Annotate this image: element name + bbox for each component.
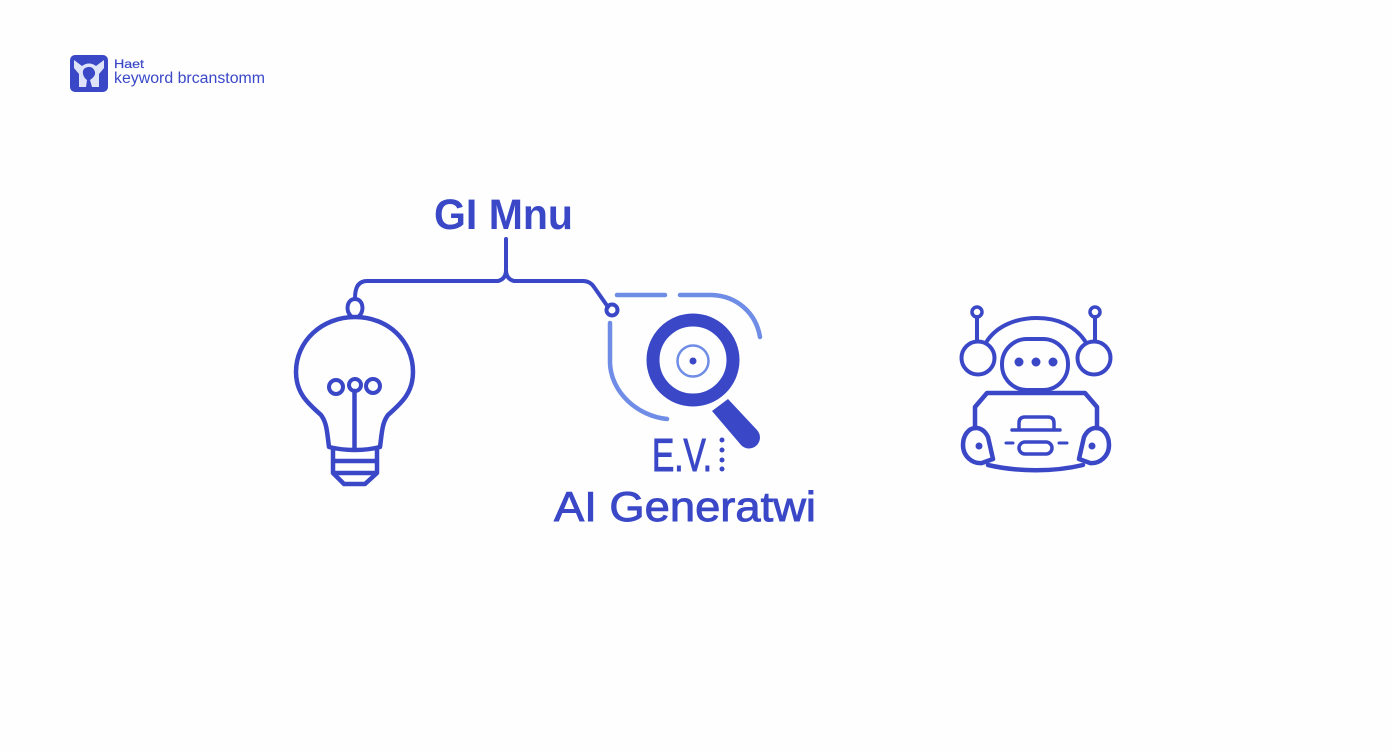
label: E.V.: E.V. — [652, 429, 712, 481]
icon: light bulb — [296, 299, 413, 484]
bulb top loop — [348, 299, 362, 316]
connector: menu branches to bulb and magnifier — [355, 239, 618, 316]
robot body — [975, 393, 1097, 428]
target in lens — [678, 346, 708, 376]
label: AI Generatwi: AI Generatwi — [554, 483, 816, 530]
dashed arc frame — [610, 295, 760, 419]
robot face — [1002, 339, 1068, 390]
robot ears — [962, 342, 1110, 374]
bulb glass — [296, 317, 413, 450]
bulb screw base — [333, 449, 377, 484]
robot antennas — [972, 307, 1100, 340]
magnifier group — [610, 295, 760, 448]
magnifier handle — [712, 399, 760, 448]
magnifier ring — [653, 320, 733, 400]
robot chest details — [1006, 417, 1067, 454]
logo block — [70, 55, 265, 92]
logo text: main line: keyword brcanstomm — [114, 70, 265, 87]
robot base line — [988, 465, 1083, 470]
robot head arc — [987, 318, 1085, 341]
heading: AI menu: GI Mnu — [434, 191, 573, 239]
icon: logo badge — [70, 55, 108, 92]
bulb filament — [329, 379, 380, 449]
icon: robot — [962, 307, 1110, 470]
logo text: small line: Haet — [114, 59, 145, 71]
robot wheels — [963, 428, 1109, 463]
